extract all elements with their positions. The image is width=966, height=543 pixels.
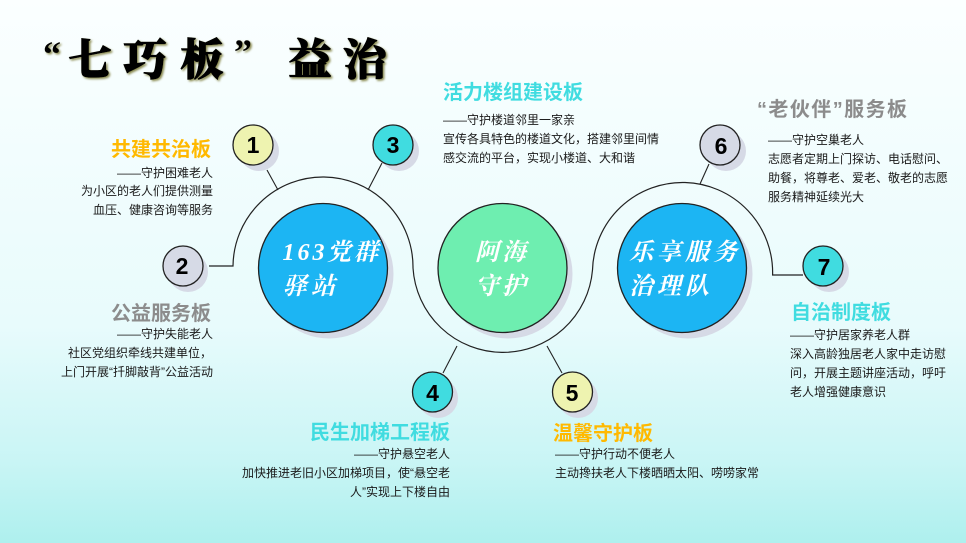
text block: 活力楼组建设板: 宣传各具特色的楼道文化，搭建邻里间情 [443,131,659,146]
text block: 民生加梯工程板: 人”实现上下楼自由 [350,484,450,499]
text block: 公益服务板: 社区党组织牵线共建单位， [68,345,212,360]
text block: 温馨守护板: 主动搀扶老人下楼晒晒太阳、唠唠家常 [555,465,759,480]
hub: 阿海守护: 守 [475,266,503,301]
hub: 阿海守护: 海 [502,232,530,267]
text block: 温馨守护板: 温馨守护板 [553,422,653,445]
node 5: 5 [566,380,579,406]
title: 巧 [124,27,166,88]
text block: “老伙伴”服务板: ——守护空巢老人 [768,133,864,147]
text block: 自治制度板: 老人增强健康意识 [790,384,886,399]
text block: 民生加梯工程板 [242,421,450,499]
text block: 活力楼组建设板: 活力楼组建设板 [443,81,583,104]
hub: 乐享服务治理队: 治 [629,266,659,301]
text block: 自治制度板: 深入高龄独居老人家中走访慰 [790,346,946,361]
text block: 公益服务板: ——守护失能老人 [117,326,213,341]
node 2 [163,246,208,292]
text block: 活力楼组建设板: ——守护楼道邻里一家亲 [443,112,575,127]
node 2: 2 [176,253,188,279]
hub: 阿海守护: 护 [502,266,530,301]
text block: 温馨守护板 [553,422,759,480]
hub: 163党群驿站: 163 [282,240,328,266]
node 1 [233,125,279,171]
text block: “老伙伴”服务板: “老伙伴”服务板 [757,98,907,121]
text block: 共建共治板: 血压、健康咨询等服务 [93,202,213,217]
node 5 [552,372,598,418]
hub: 163党群驿站: 站 [311,266,338,301]
hub: 乐享服务治理队: 乐 [629,232,656,267]
text block: 民生加梯工程板: 加快推进老旧小区加梯项目，使“悬空老 [242,465,450,480]
text block: “老伙伴”服务板: 志愿者定期上门探访、电话慰问、 [768,151,948,166]
hub: 乐享服务治理队: 理 [657,266,685,301]
text block: 公益服务板 [61,302,213,379]
title: 治 [344,27,392,88]
text block: 民生加梯工程板: ——守护悬空老人 [354,447,450,461]
text block: “老伙伴”服务板 [757,98,948,204]
hub: 阿海守护: 阿 [475,232,504,267]
text block: 公益服务板: 公益服务板 [111,302,211,325]
text block: 民生加梯工程板: 民生加梯工程板 [310,421,450,444]
node 6: 6 [715,133,727,159]
text block: 共建共治板: 为小区的老人们提供测量 [81,183,213,198]
hub: 乐享服务治理队: 务 [713,232,740,267]
text block: 共建共治板: ——守护困难老人 [117,166,213,180]
node 3 [373,125,419,171]
hub: 乐享服务治理队 [618,204,752,338]
text block: 活力楼组建设板 [443,81,659,165]
node 7 [803,246,849,292]
text block: 共建共治板: 共建共治板 [111,138,211,161]
node 7: 7 [818,254,830,280]
title: 板 [180,27,224,88]
hub: 阿海守护 [438,204,572,338]
title: 七 [68,27,112,88]
text block: 温馨守护板: ——守护行动不便老人 [555,447,675,461]
hub: 乐享服务治理队: 队 [685,266,709,301]
node 3: 3 [387,132,399,158]
text block: “老伙伴”服务板: 助餐，将尊老、爱老、敬老的志愿 [768,170,948,185]
text block: 活力楼组建设板: 感交流的平台，实现小楼道、大和谐 [443,150,635,165]
text block: “老伙伴”服务板: 服务精神延续光大 [768,189,864,204]
title: ” [234,32,252,72]
hub: 乐享服务治理队: 服 [685,232,713,267]
hub: 163党群驿站: 驿 [283,266,310,301]
node 6 [700,125,746,171]
text block: 自治制度板: ——守护居家养老人群 [790,327,910,342]
text block: 公益服务板: 上门开展“扦脚敲背”公益活动 [61,364,213,379]
connector lines [267,163,709,373]
hub: 乐享服务治理队: 享 [657,232,685,267]
node 4: 4 [426,380,439,406]
node 1: 1 [247,132,260,158]
connecting wave line [209,177,803,352]
hub: 163党群驿站 [258,204,394,338]
text block: 自治制度板: 自治制度板 [791,301,891,324]
hub: 163党群驿站: 党 [327,232,354,267]
text block: 自治制度板: 问，开展主题讲座活动，呼吁 [790,365,946,380]
title: “ [43,34,61,74]
node 4 [412,372,458,418]
text block: 自治制度板 [790,301,946,399]
title [43,27,392,88]
text block: 共建共治板 [81,138,213,217]
title: 益 [288,27,332,88]
hub: 163党群驿站: 群 [354,232,382,267]
